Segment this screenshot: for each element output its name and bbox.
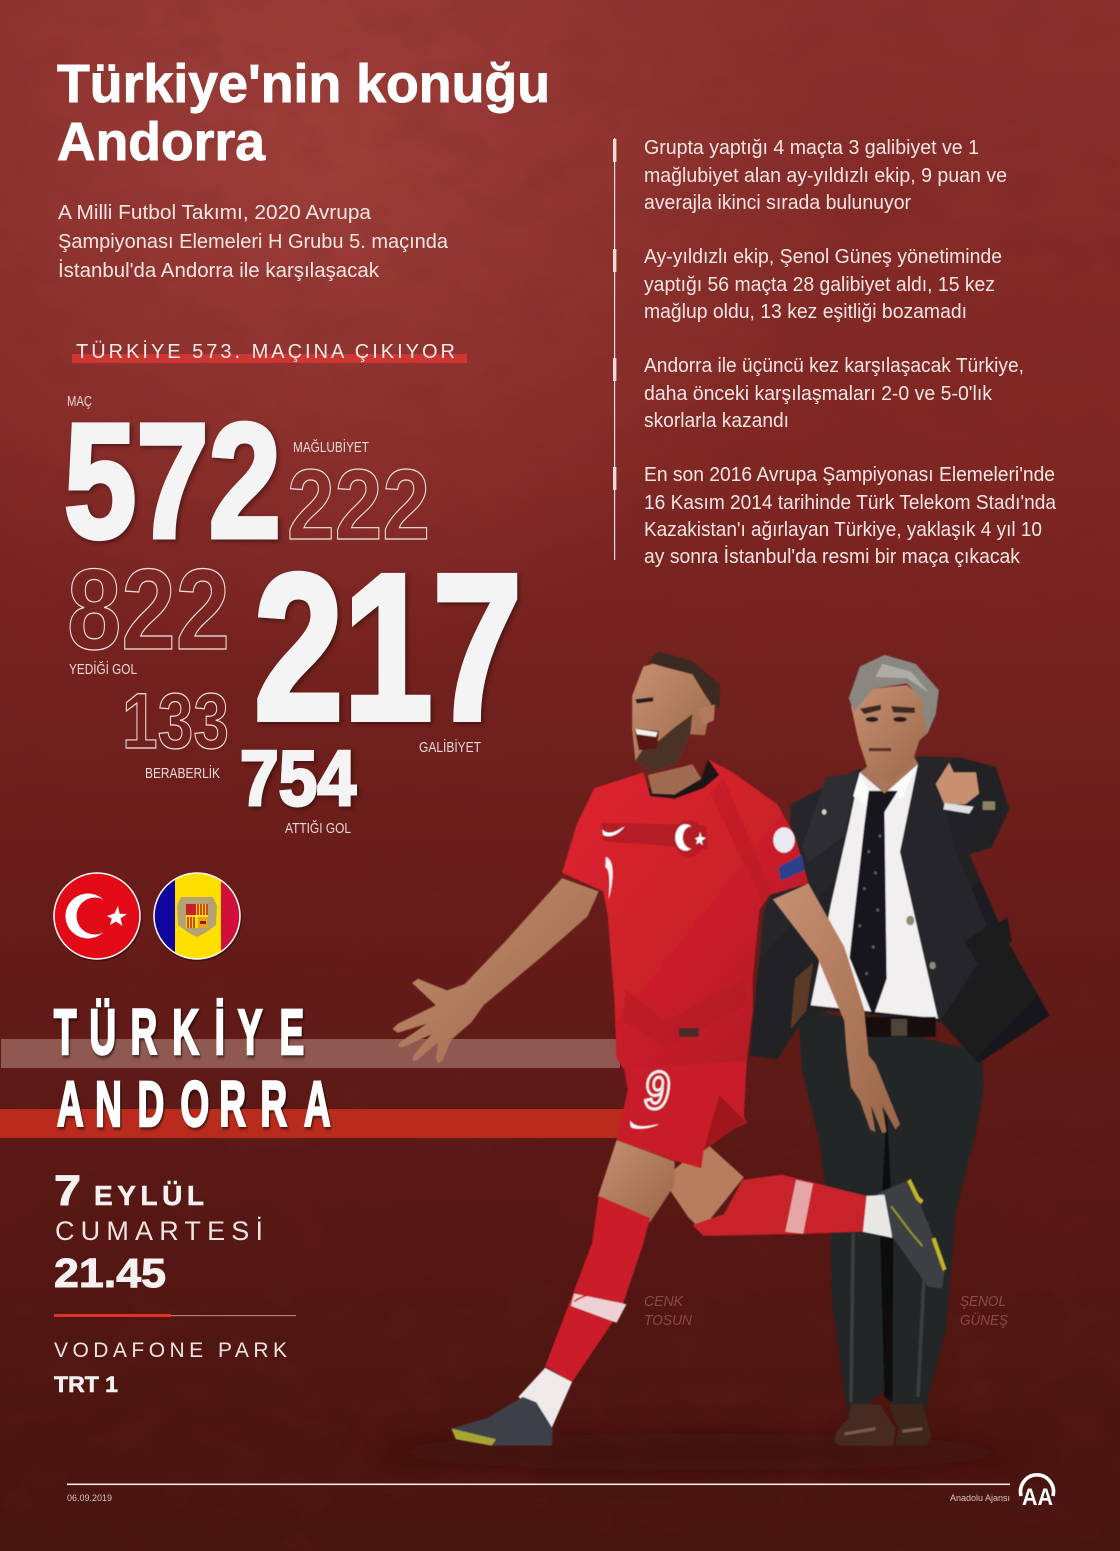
subtitle: Şampiyonası Elemeleri H Grubu 5. maçında xyxy=(58,231,449,253)
figure: coach xyxy=(750,655,1050,1446)
subtitle xyxy=(58,202,449,282)
icon: Turkish flag xyxy=(54,873,142,962)
stat: 572 matches: 572 xyxy=(64,389,281,572)
timeline rule xyxy=(613,138,616,560)
info paragraph 1: Grupta yaptığı 4 maçta 3 galibiyet ve 1 xyxy=(644,137,979,159)
stat: 217 wins: GALİBİYET xyxy=(419,738,481,756)
info paragraph 2: Ay-yıldızlı ekip, Şenol Güneş yönetiminde xyxy=(644,246,1002,268)
footer date: 06.09.2019 xyxy=(67,1493,112,1503)
stat: 822 goals conceded: YEDİĞİ GOL xyxy=(69,660,137,678)
stats heading: TÜRKİYE 573. MAÇINA ÇIKIYOR xyxy=(76,340,455,363)
stat: 754 goals scored: 754 xyxy=(240,734,356,822)
stat: 572 matches: MAÇ xyxy=(67,393,92,410)
icon: AA logo: AA xyxy=(1022,1484,1053,1511)
stat: 133 draws: 133 xyxy=(122,676,229,765)
footer rule xyxy=(67,1484,1010,1485)
match date: EYLÜL xyxy=(94,1180,204,1211)
name: Şenol Güneş: ŞENOL xyxy=(960,1293,1006,1310)
title: Türkiye'nin konuğu xyxy=(57,54,550,114)
figure: player xyxy=(392,652,945,1446)
match date: 7 xyxy=(54,1167,81,1215)
info paragraph 4: En son 2016 Avrupa Şampiyonası Elemeleri'nde xyxy=(644,464,1055,486)
icon: AA logo xyxy=(1021,1475,1054,1511)
info paragraph 1: mağlubiyet alan ay-yıldızlı ekip, 9 puan ve xyxy=(644,165,1007,187)
info paragraph 1: averajla ikinci sırada bulunuyor xyxy=(644,192,911,214)
ground shadow xyxy=(360,1434,1040,1470)
info paragraph 4: 16 Kasım 2014 tarihinde Türk Telekom Stadı'nda xyxy=(644,492,1057,514)
info paragraph 2: mağlup oldu, 13 kez eşitliği bozamadı xyxy=(644,301,967,323)
stat: 222 losses: 222 xyxy=(287,449,430,561)
info paragraph 2: yaptığı 56 maçta 28 galibiyet aldı, 15 kez xyxy=(644,274,995,296)
venue: VODAFONE PARK xyxy=(54,1339,287,1362)
stat: 822 goals conceded: 822 xyxy=(67,546,230,674)
stat: 217 wins: 217 xyxy=(254,532,522,764)
heading: TÜRKİYE: TÜRKİYE xyxy=(54,998,304,1069)
stat: 222 losses: MAĞLUBİYET xyxy=(293,438,369,456)
stat: 133 draws: BERABERLİK xyxy=(145,764,220,782)
subtitle: İstanbul'da Andorra ile karşılaşacak xyxy=(58,259,380,282)
stat: 754 goals scored: ATTIĞI GOL xyxy=(285,820,351,837)
title: Andorra xyxy=(57,112,266,172)
name: Şenol Güneş: GÜNEŞ xyxy=(960,1311,1008,1329)
match date: CUMARTESİ xyxy=(55,1215,263,1246)
match date: 21.45 xyxy=(54,1250,166,1296)
figure: player: 9 xyxy=(644,1062,670,1120)
subtitle: A Milli Futbol Takımı, 2020 Avrupa xyxy=(58,202,372,224)
broadcaster: TRT 1 xyxy=(54,1372,118,1397)
info paragraph 3: Andorra ile üçüncü kez karşılaşacak Türkiye, xyxy=(644,355,1024,377)
info paragraph 3 xyxy=(644,355,1024,432)
band: red stripe xyxy=(0,1109,625,1138)
name: Cenk Tosun xyxy=(644,1293,692,1329)
info paragraph 3: skorlarla kazandı xyxy=(644,410,789,432)
info paragraph 4: ay sonra İstanbul'da resmi bir maça çıkacak xyxy=(644,545,1021,568)
divider xyxy=(54,1314,296,1317)
title xyxy=(57,54,550,172)
icon: Andorran flag xyxy=(154,873,242,962)
footer credit: Anadolu Ajansı xyxy=(950,1493,1010,1503)
name: Şenol Güneş xyxy=(960,1293,1008,1329)
info paragraph 1 xyxy=(644,137,1007,214)
info paragraph 2 xyxy=(644,246,1002,323)
match date xyxy=(54,1167,263,1296)
heading: ANDORRA: ANDORRA xyxy=(57,1070,331,1141)
info paragraph 4 xyxy=(644,464,1057,568)
band: light stripe xyxy=(1,1039,620,1068)
name: Cenk Tosun: CENK xyxy=(644,1293,684,1310)
info paragraph 4: Kazakistan'ı ağırlayan Türkiye, yaklaşık 4 yıl 10 xyxy=(644,519,1042,541)
info paragraph 3: daha önceki karşılaşmaları 2-0 ve 5-0'lık xyxy=(644,383,993,405)
name: Cenk Tosun: TOSUN xyxy=(644,1312,692,1329)
